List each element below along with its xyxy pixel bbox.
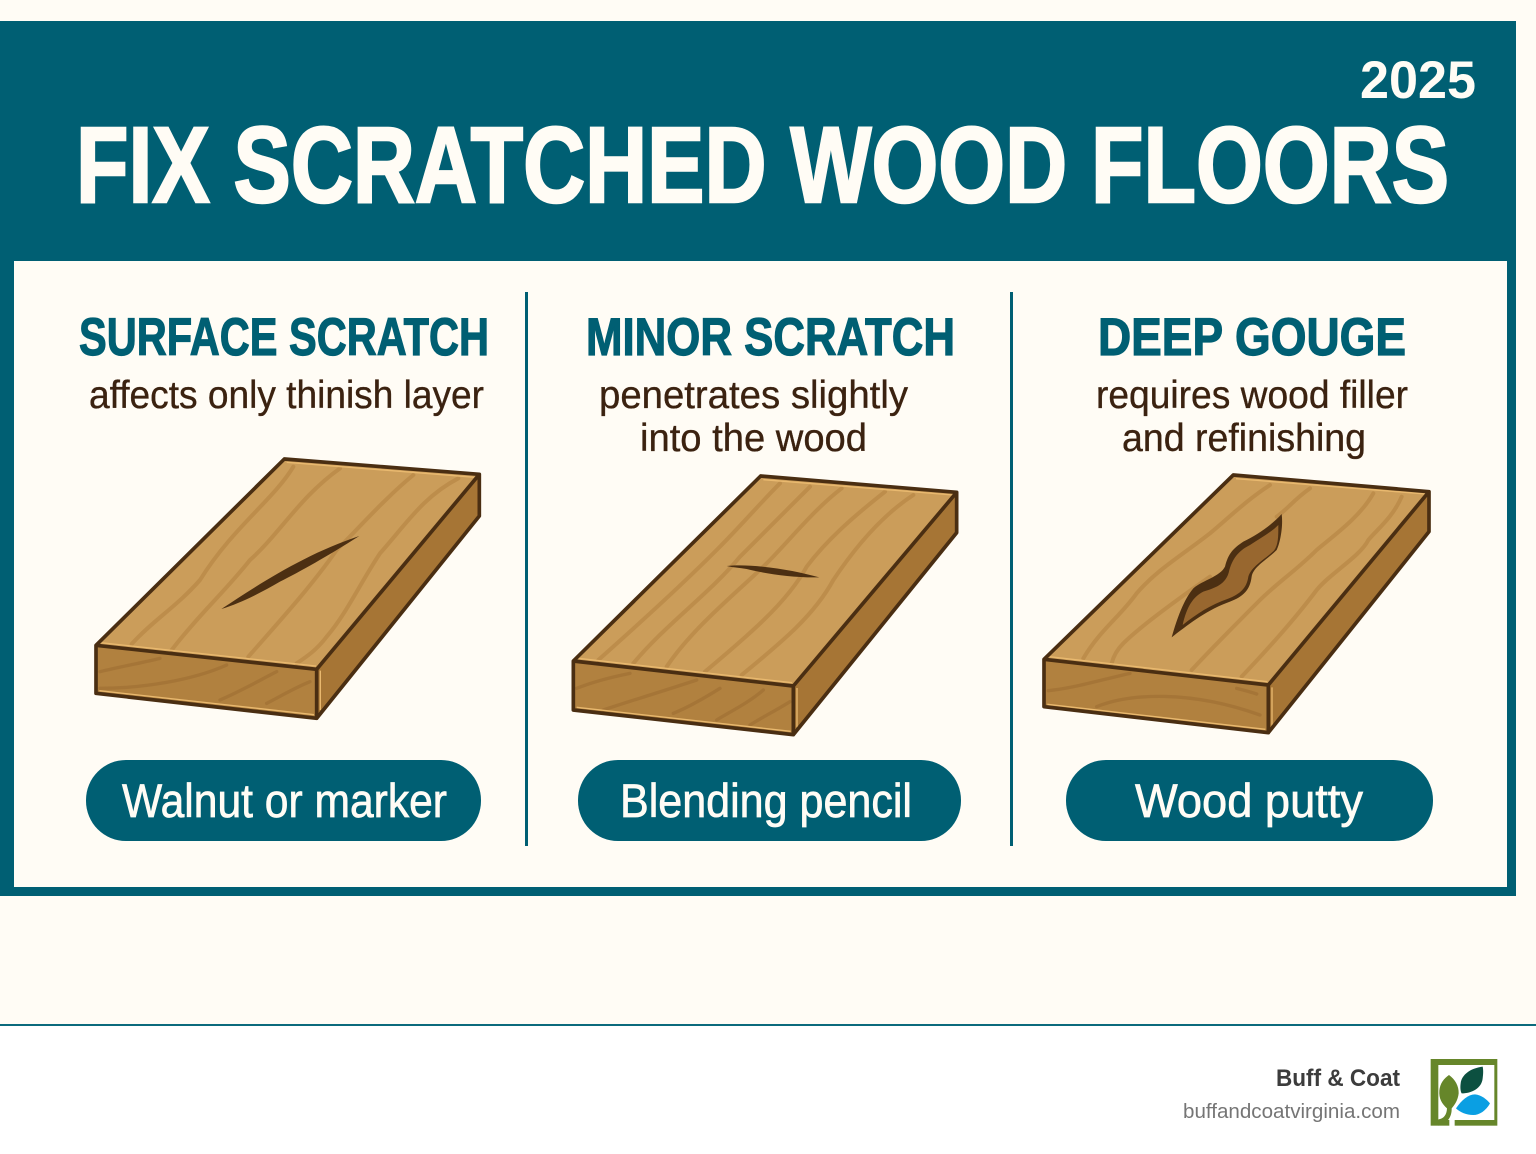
panel: surface scratch <box>79 308 489 841</box>
panel: minor scratch <box>573 308 961 841</box>
footer brand name: Buff & Coat <box>1276 1065 1400 1092</box>
description: deep gouge: requires wood filler <box>1096 374 1408 417</box>
main content panel <box>14 261 1507 887</box>
outer teal frame and header band <box>0 21 1516 896</box>
column divider right <box>1010 292 1013 846</box>
description: deep gouge: and refinishing <box>1122 417 1366 460</box>
label pill: wood putty <box>1066 760 1433 841</box>
icon: wood plank with thin surface scratch <box>96 459 479 718</box>
icon: wood plank with deep gouge <box>1044 475 1429 733</box>
heading: deep gouge: DEEP GOUGE <box>1098 308 1406 367</box>
label pill: wood putty: Wood putty <box>1135 774 1363 827</box>
description: minor scratch <box>599 374 908 460</box>
description: surface scratch: affects only thinish layer <box>89 374 484 417</box>
description: minor scratch: into the wood <box>640 417 867 460</box>
heading: surface scratch: SURFACE SCRATCH <box>79 308 489 367</box>
column divider left <box>525 292 528 846</box>
label pill: blending pencil: Blending pencil <box>620 774 912 827</box>
description: minor scratch: penetrates slightly <box>599 374 908 417</box>
description: deep gouge <box>1096 374 1408 460</box>
label pill: blending pencil <box>578 760 961 841</box>
label pill: walnut or marker <box>86 760 481 841</box>
year label: 2025 <box>1360 51 1476 110</box>
panel: deep gouge <box>1044 308 1433 841</box>
heading: minor scratch: MINOR SCRATCH <box>586 308 955 367</box>
footer <box>0 1024 1536 1154</box>
footer website: buffandcoatvirginia.com <box>1183 1101 1400 1123</box>
label pill: walnut or marker: Walnut or marker <box>122 774 447 827</box>
icon: wood plank with minor scratch <box>573 476 957 735</box>
icon: brand logo <box>1431 1059 1497 1126</box>
